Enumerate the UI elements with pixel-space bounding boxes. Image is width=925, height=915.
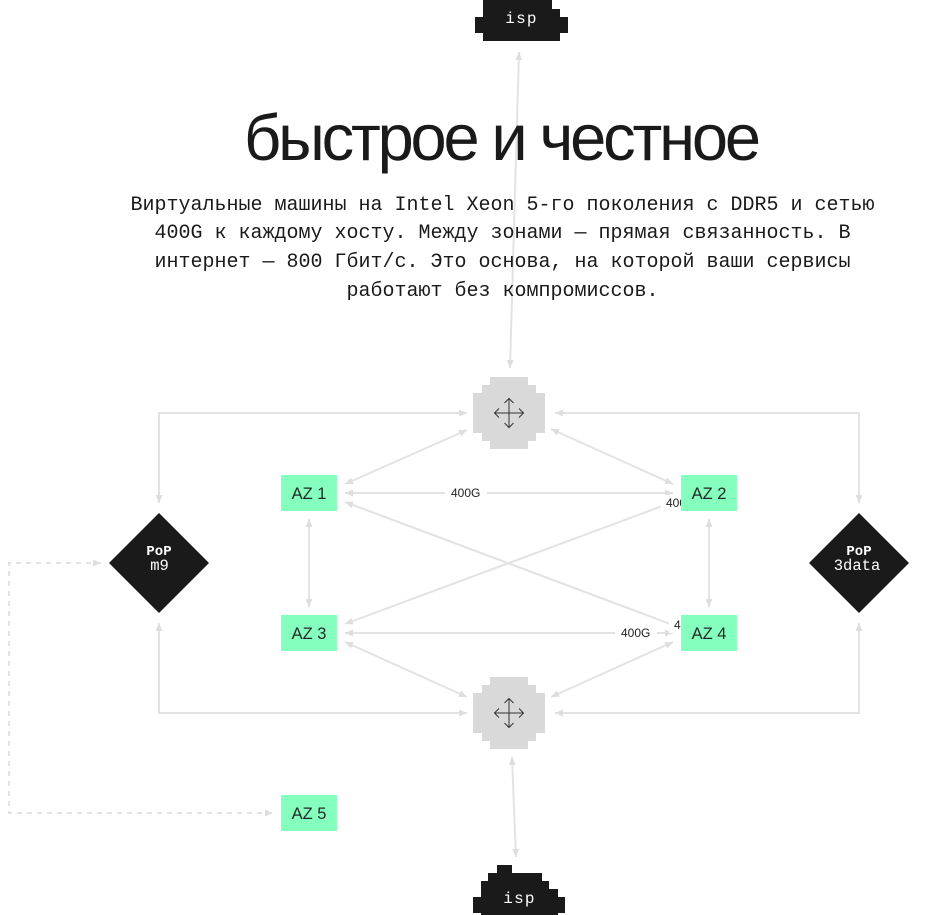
arrow: AZ 1 to AZ 2 [345, 492, 673, 494]
arrow: bottom router to PoP 3data [555, 623, 859, 713]
router bottom [473, 677, 545, 749]
AZ 2: AZ 2 [692, 485, 726, 503]
AZ 4: AZ 4 [692, 625, 726, 643]
arrow: AZ 1 to AZ 4 [345, 502, 673, 625]
PoP 3data [809, 513, 909, 613]
PoP m9 [109, 513, 209, 613]
arrow: top isp to top router [510, 52, 519, 368]
icon: move arrows [494, 698, 524, 728]
AZ 5: AZ 5 [292, 805, 326, 823]
arrow: top router to PoP m9 [159, 413, 467, 503]
isp top [475, 0, 568, 41]
isp bottom: isp [503, 890, 536, 908]
PoP m9: m9 [150, 557, 169, 575]
AZ 4 [681, 615, 737, 651]
link label 400G AZ1-AZ2 [445, 485, 487, 501]
intro text: 400G к каждому хосту. Между зонами — прямая связанность. В [154, 222, 851, 245]
arrow: AZ 3 to bottom router [345, 642, 467, 697]
AZ 1 [281, 475, 337, 511]
link label 400G AZ1-AZ4: 400G [674, 618, 703, 632]
arrow: bottom router to PoP m9 [159, 623, 467, 713]
PoP 3data: PoP [846, 544, 872, 560]
arrow: AZ 1 to AZ 3 [308, 519, 310, 607]
AZ 1: AZ 1 [292, 485, 326, 503]
isp top: isp [505, 10, 538, 28]
intro text: интернет — 800 Гбит/с. Это основа, на которой ваши сервисы [154, 251, 851, 274]
link label 400G AZ1-AZ2: 400G [451, 486, 480, 500]
intro text: Виртуальные машины на Intel Xeon 5-го поколения с DDR5 и сетью [130, 194, 875, 217]
AZ 2 [681, 475, 737, 511]
AZ 3 [281, 615, 337, 651]
intro text: работают без компромиссов. [346, 280, 659, 303]
link label 400G AZ3-AZ4: 400G [621, 626, 650, 640]
arrow: top router to AZ 2 [551, 429, 673, 484]
arrow: AZ 3 to AZ 2 [345, 502, 673, 624]
arrow: AZ 4 to bottom router [551, 642, 673, 697]
link label 400G AZ1-AZ4 [669, 617, 711, 633]
title: быстрое и честное [244, 101, 761, 174]
arrow: bottom router to bottom isp [512, 757, 516, 857]
intro text [130, 194, 875, 303]
arrow: top router to PoP 3data [555, 413, 859, 503]
arrow: top router to AZ 1 [345, 430, 467, 484]
link label 400G AZ3-AZ2 [661, 495, 703, 511]
arrow: dashed AZ 5 to PoP m9 [9, 563, 273, 813]
isp bottom [473, 865, 565, 915]
router top [473, 377, 545, 449]
PoP 3data: 3data [834, 557, 880, 575]
AZ 3: AZ 3 [292, 625, 326, 643]
PoP m9: PoP [146, 544, 172, 560]
arrow: AZ 2 to AZ 4 [708, 519, 710, 607]
link label 400G AZ3-AZ4 [615, 625, 657, 641]
arrow: AZ 3 to AZ 4 [345, 632, 673, 634]
link label 400G AZ3-AZ2: 400G [666, 496, 695, 510]
icon: move arrows [494, 398, 524, 428]
AZ 5 [281, 795, 337, 831]
